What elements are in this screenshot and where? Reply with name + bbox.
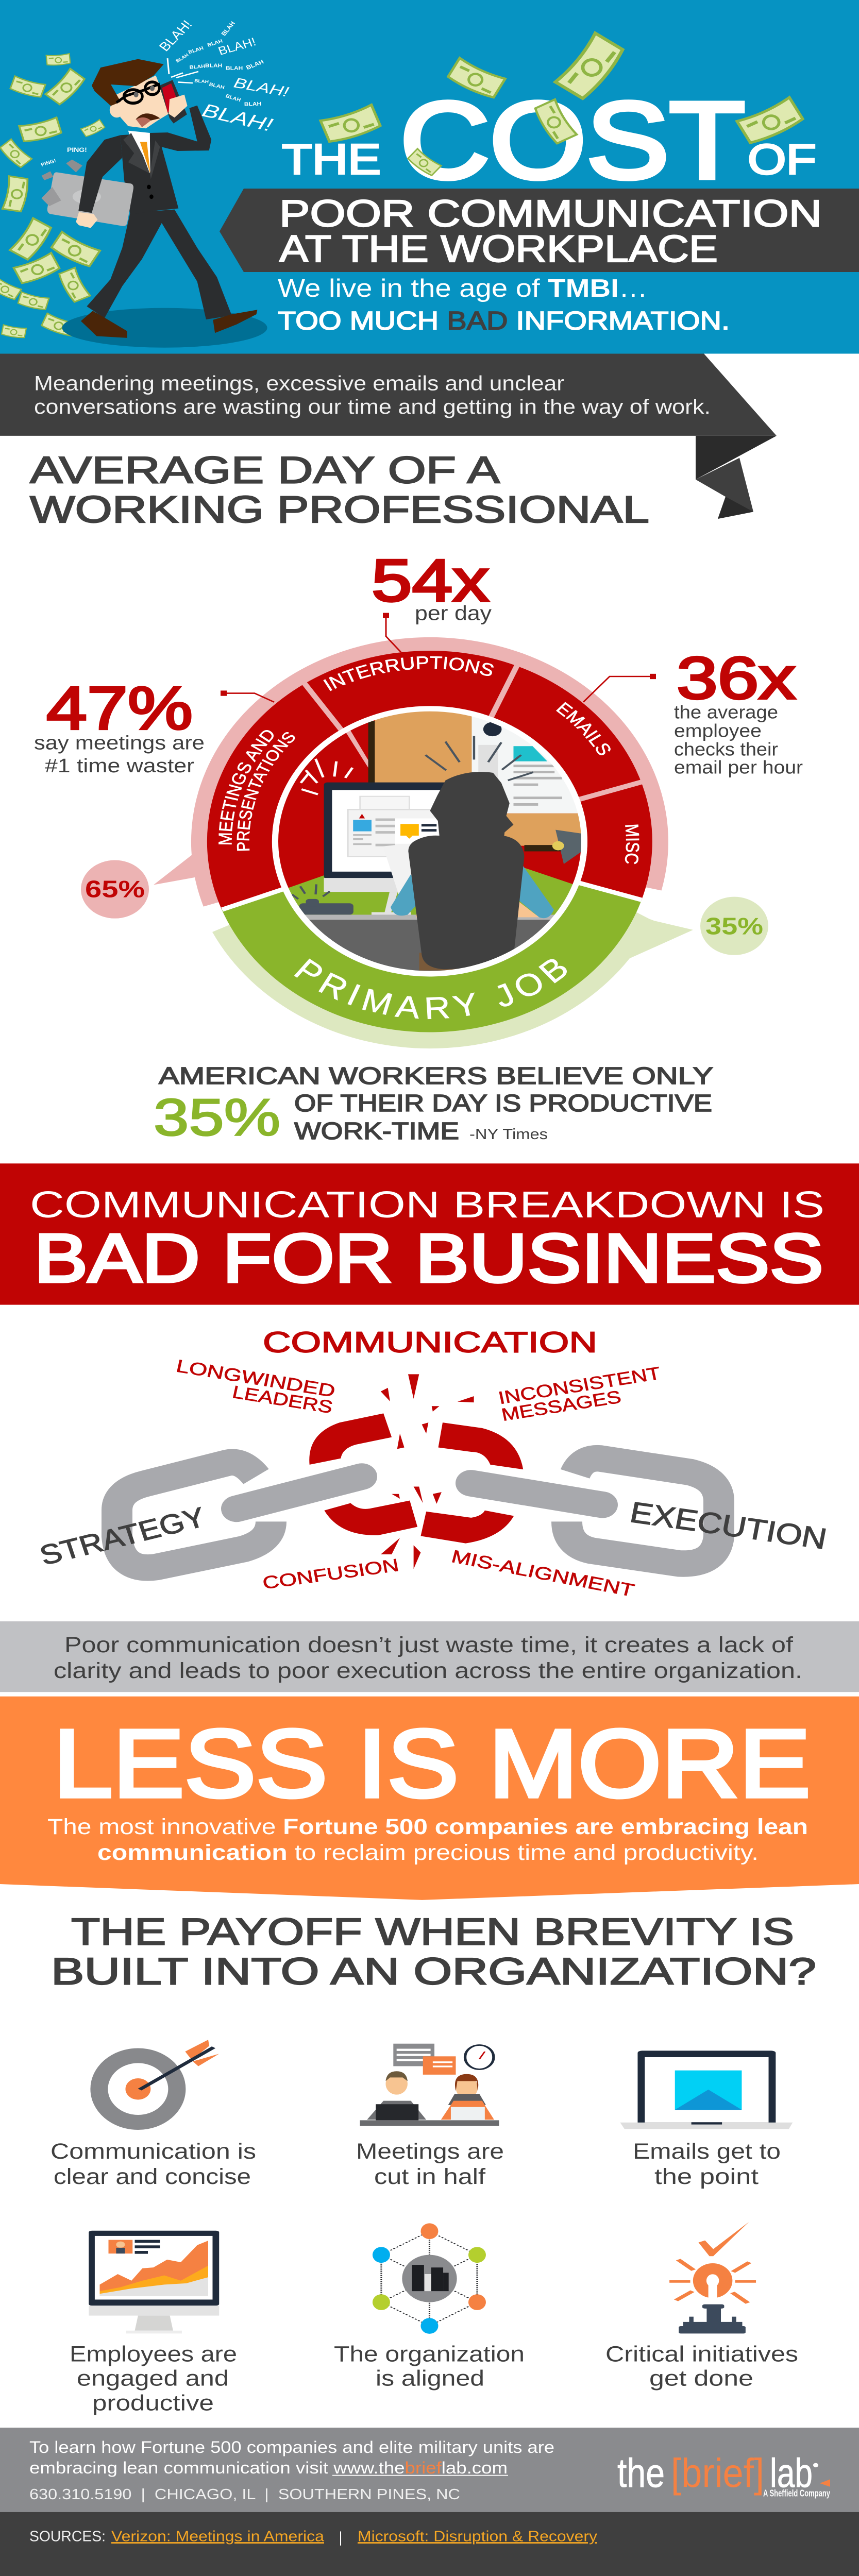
benefit: emails to the point [620, 2050, 793, 2189]
footer: contact: 630.310.5190 | CHICAGO, IL | SOUTHERN PINES, NC [29, 2485, 460, 2502]
scene: worker at desk [278, 711, 581, 971]
icon: target [90, 2040, 219, 2130]
intro ribbon: conversations are wasting our time and getting in the way of work. [34, 395, 711, 418]
blah text: BLAH [188, 46, 205, 55]
footer: sources [0, 2512, 859, 2576]
blah text: BLAH [208, 82, 225, 91]
benefit: critical initiatives: Critical initiatives [605, 2342, 798, 2366]
icon: monitor with chart [89, 2231, 219, 2333]
heading: average day: AVERAGE DAY OF A [30, 449, 500, 491]
benefit: clear communication: Communication is [50, 2139, 256, 2163]
stat: 36x emails: the average [674, 702, 778, 723]
subtitle banner [220, 189, 859, 272]
broken chain diagram: INCONSISTENT [496, 1363, 662, 1408]
benefit: engaged employees: productive [92, 2391, 214, 2415]
footer: contact: To learn how Fortune 500 companies and elite military units are [29, 2438, 554, 2456]
callout: productive time: OF THEIR DAY IS PRODUCTIVE [294, 1090, 712, 1116]
intro ribbon [0, 353, 777, 519]
heading: payoff [51, 1910, 816, 1992]
icon: hub network [373, 2223, 486, 2334]
footer: sources: Verizon: Meetings in America [111, 2528, 324, 2545]
benefit: shorter meetings [356, 2044, 504, 2189]
blah text: BLAH [175, 53, 190, 63]
broken chain diagram: CONFUSION [261, 1555, 400, 1593]
light green 35 percent ring: 35% [705, 912, 763, 940]
segment labels: EMAILS [556, 702, 611, 755]
blah text: BLAH [189, 64, 206, 70]
blah text: BLAH [245, 58, 265, 71]
subtitle banner: POOR COMMUNICATION [279, 192, 822, 234]
callout: productive time: AMERICAN WORKERS BELIEVE ONLY [159, 1062, 713, 1089]
orange banner: less is more: communication to reclaim precious time and productivity. [97, 1840, 759, 1865]
bills around title [321, 33, 626, 144]
pink 65 percent ring: 65% [85, 875, 145, 903]
title: the cost of [282, 79, 816, 201]
blah text [40, 18, 290, 168]
gray text band [0, 1621, 859, 1692]
stat: 47 percent meetings [34, 675, 274, 776]
banner: bad for business: BAD FOR BUSINESS [34, 1219, 823, 1297]
icon: meeting [360, 2044, 499, 2126]
gray text band: clarity and leads to poor execution across the entire organization. [54, 1658, 802, 1683]
logo: the brief lab [617, 2450, 830, 2499]
stat: 54x interruptions [372, 547, 492, 652]
logo: the brief lab: lab [770, 2450, 813, 2496]
blah text: BLAH! [216, 36, 258, 58]
pink 65 percent ring [81, 645, 660, 919]
broken chain diagram: STRATEGY [36, 1502, 209, 1571]
stat: 54x interruptions: 54x [372, 547, 489, 614]
flying money [0, 54, 105, 338]
broken chain diagram [36, 1326, 829, 1600]
segment labels: MISC [625, 824, 639, 865]
blah text: BLAH! [199, 100, 275, 135]
blah text: BLAH [194, 78, 209, 84]
blah text: BLAH! [232, 75, 290, 100]
banner: bad for business [0, 1163, 859, 1305]
heading: average day [30, 449, 649, 531]
stat: 47 percent meetings: #1 time waster [45, 755, 194, 776]
benefit: emails to the point: the point [654, 2164, 759, 2189]
segments [240, 679, 620, 900]
blah text: BLAH [226, 65, 243, 71]
heading: average day: WORKING PROFESSIONAL [30, 488, 649, 531]
light green 35 percent ring [222, 897, 768, 1040]
stat: 47 percent meetings: 47% [46, 675, 193, 742]
footer: sources: SOURCES: [29, 2528, 106, 2545]
blah text: PING! [40, 158, 57, 168]
footer: contact: embracing lean communication visit www.thebrieflab.com [29, 2459, 508, 2478]
blah text: BLAH [220, 20, 237, 37]
segment labels: MEETINGS AND [218, 730, 274, 845]
segment labels: PRIMARY JOB [294, 958, 567, 1019]
footer: contact [0, 2428, 859, 2512]
logo: the brief lab: the [617, 2450, 665, 2496]
stat: 54x interruptions: per day [415, 602, 492, 624]
labels: COMMUNICATION [263, 1326, 597, 1359]
benefit: engaged employees: Employees are [70, 2342, 237, 2366]
callout: productive time [154, 1062, 713, 1147]
stat: 36x emails: email per hour [674, 757, 803, 778]
donut chart: working day [81, 637, 768, 1049]
intro ribbon: Meandering meetings, excessive emails and unclear [34, 372, 564, 395]
logo: the brief lab: [brief] [671, 2450, 764, 2496]
benefit: shorter meetings: cut in half [374, 2164, 485, 2189]
bills over title [407, 97, 804, 176]
broken chain diagram: MIS-ALIGNMENT [449, 1546, 636, 1600]
subtitle banner: AT THE WORKPLACE [279, 228, 718, 270]
broken chain diagram: EXECUTION [628, 1496, 829, 1555]
benefit: shorter meetings: Meetings are [356, 2139, 504, 2163]
tagline: TOO MUCH BAD INFORMATION. [278, 307, 730, 335]
blah text: BLAH! [156, 18, 195, 54]
stat: 36x emails: 36x [677, 645, 796, 711]
benefit: clear communication: clear and concise [54, 2164, 251, 2189]
benefit: critical initiatives: get done [649, 2366, 753, 2391]
callout: productive time: -NY Times [469, 1125, 548, 1143]
benefit: aligned organization: is aligned [376, 2366, 484, 2391]
callout: productive time: 35% [154, 1089, 280, 1147]
title: the cost of: COST [400, 79, 745, 201]
orange banner: less is more [0, 1697, 859, 1900]
blah text: BLAH [225, 94, 242, 103]
broken chain diagram: LEADERS [230, 1382, 334, 1417]
blah text: BLAH [244, 101, 261, 107]
benefit: aligned organization [334, 2223, 525, 2391]
benefit: aligned organization: The organization [334, 2342, 525, 2366]
benefit: emails to the point: Emails get to [633, 2139, 781, 2163]
blah text: BLAH [207, 39, 224, 48]
illustration: businessman on phone [41, 59, 267, 348]
benefit: engaged employees: engaged and [77, 2366, 229, 2391]
header panel [0, 0, 859, 353]
icon: bulb with check [669, 2222, 756, 2333]
right gray link [471, 1459, 719, 1564]
heading: payoff: THE PAYOFF WHEN BREVITY IS [71, 1910, 794, 1953]
banner: bad for business: COMMUNICATION BREAKDOWN IS [30, 1184, 824, 1226]
title: the cost of: THE [282, 135, 381, 183]
stat: 36x emails: employee [674, 721, 762, 741]
benefit: critical initiatives [605, 2222, 798, 2391]
segment labels [218, 656, 639, 1019]
heading: payoff: BUILT INTO AN ORGANIZATION? [51, 1950, 816, 1992]
orange banner: less is more: The most innovative Fortune 500 companies are embracing lean [47, 1815, 808, 1839]
stat: 36x emails: checks their [674, 739, 778, 760]
segment labels: INTERRUPTIONS [323, 656, 494, 691]
footer: sources: Microsoft: Disruption & Recovery [358, 2528, 597, 2545]
tagline: We live in the age of TMBI… [278, 275, 648, 302]
broken chain diagram: MESSAGES [499, 1386, 623, 1425]
tagline [278, 275, 730, 335]
blah text: BLAH [205, 63, 222, 69]
segment labels: PRESENTATIONS [237, 732, 295, 851]
benefit: clear communication [50, 2040, 256, 2189]
title: the cost of: OF [748, 135, 816, 183]
icon: laptop with envelope [620, 2050, 793, 2129]
callout: productive time: WORK-TIME [294, 1117, 459, 1144]
benefit: engaged employees [70, 2231, 237, 2415]
left gray link [117, 1462, 362, 1568]
red broken link [309, 1374, 523, 1569]
blah text: PING! [67, 146, 87, 154]
stat: 36x emails [583, 645, 803, 778]
broken chain diagram: LONGWINDED [174, 1355, 337, 1401]
stat: 47 percent meetings: say meetings are [34, 732, 205, 754]
gray text band: Poor communication doesn’t just waste time, it creates a lack of [64, 1632, 793, 1657]
orange banner: less is more: LESS IS MORE [53, 1710, 811, 1818]
